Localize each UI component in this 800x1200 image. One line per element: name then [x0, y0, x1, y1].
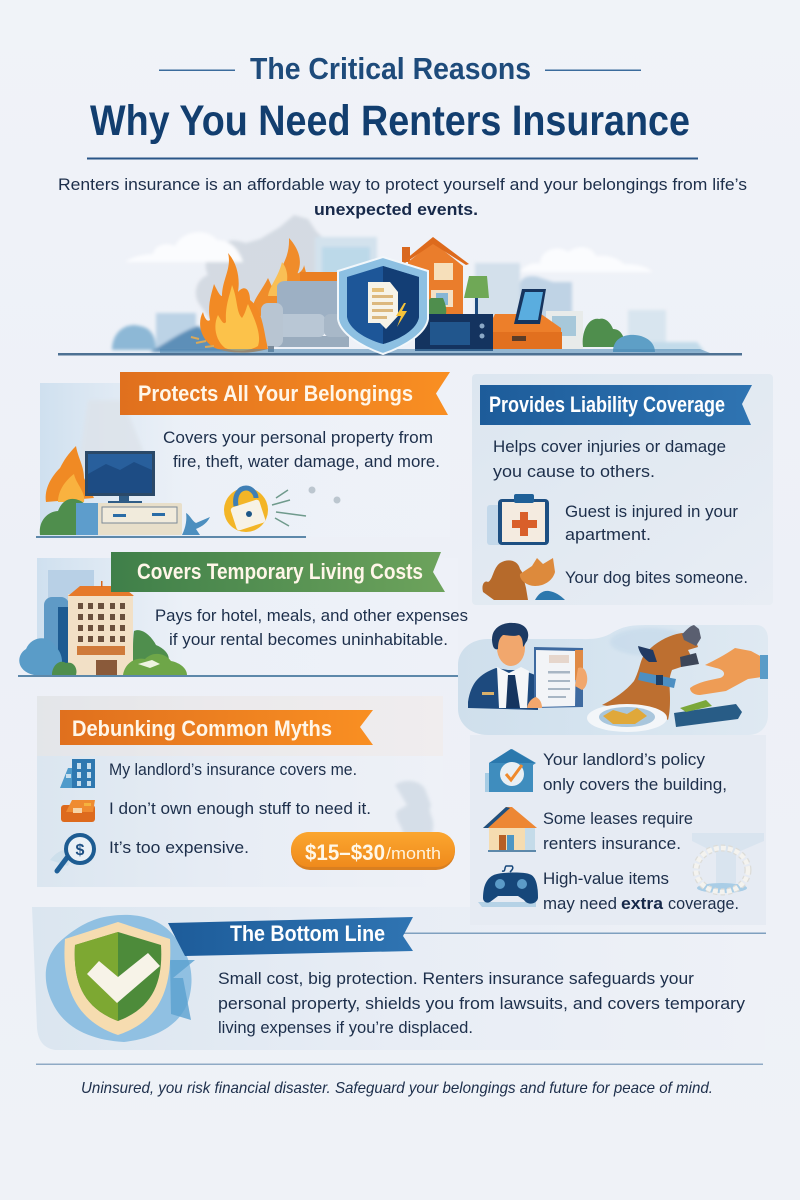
- text block: It’s too expensive.: [109, 838, 249, 857]
- banner: debunking common myths: Debunking Common Myths: [72, 716, 332, 741]
- illustration: burning computer desk: [40, 400, 210, 535]
- banner: provides liability coverage: Provides Liability Coverage: [489, 392, 725, 417]
- banner: the bottom line: The Bottom Line: [230, 921, 385, 946]
- icon: dogs: [482, 558, 565, 600]
- front flame: [200, 253, 268, 353]
- intro text: Renters insurance is an affordable way to protect yourself and your belongings from life’s: [58, 175, 747, 194]
- icon: game controller: [478, 866, 538, 907]
- text block: extra: [621, 894, 664, 913]
- banner: the bottom line: [168, 917, 413, 956]
- text block: Your dog bites someone.: [565, 568, 748, 587]
- text block: Some leases require: [543, 809, 693, 828]
- panel: protects belongings: [36, 372, 450, 538]
- icon: first aid clipboard: [487, 494, 549, 545]
- text block: [218, 969, 746, 1037]
- intro text: unexpected events.: [314, 200, 478, 219]
- illustration: agent, dog and injured hand: [458, 623, 768, 735]
- banner: covers temporary living costs: [111, 552, 445, 592]
- banner: protects all your belongings: [120, 372, 450, 415]
- text block: [543, 869, 739, 913]
- banner: protects all your belongings: Protects All Your Belongings: [138, 381, 413, 406]
- icon: pearl bracelet: [696, 848, 748, 893]
- plate with food: [587, 700, 742, 732]
- illustration: hotel building: [19, 570, 187, 675]
- hand: [690, 648, 768, 695]
- panel: the bottom line: [32, 907, 766, 1050]
- text block: Guest is injured in your: [565, 502, 738, 521]
- panel: debunking myths: [37, 696, 455, 887]
- banner: provides liability coverage: [480, 385, 752, 425]
- house: [400, 237, 469, 316]
- banner: debunking common myths: [60, 710, 373, 745]
- text block: [155, 606, 468, 649]
- price pill: $15–$30: [305, 840, 385, 865]
- text block: Helps cover injuries or damage: [493, 437, 726, 456]
- shield icon: [338, 257, 428, 354]
- icon: magnifier with dollar: [50, 835, 94, 871]
- title: [87, 51, 698, 160]
- text block: My landlord’s insurance covers me.: [109, 760, 357, 779]
- icon: house: [483, 807, 537, 852]
- text block: personal property, shields you from lawsuits, and covers temporary: [218, 994, 746, 1013]
- icon: house with check: [485, 749, 536, 792]
- price pill: [291, 832, 455, 870]
- text block: [543, 809, 693, 853]
- text block: [543, 750, 727, 794]
- text block: Covers your personal property from: [163, 428, 433, 447]
- sofa: [261, 272, 350, 352]
- clouds and faded skyline: [112, 215, 705, 352]
- hero illustration: fire, sofa, shield, house, electronics: [58, 215, 742, 356]
- faded display stand: [692, 833, 764, 883]
- dog: [602, 625, 701, 720]
- title: The Critical Reasons: [250, 51, 531, 86]
- text block: [163, 428, 440, 471]
- text block: High-value items: [543, 869, 669, 888]
- text block: Small cost, big protection. Renters insurance safeguards your: [218, 969, 694, 988]
- icon: green check shield: [46, 915, 195, 1042]
- banner: covers temporary living costs: Covers Temporary Living Costs: [137, 559, 423, 584]
- text block: living expenses if you’re displaced.: [218, 1018, 473, 1037]
- text block: [565, 502, 738, 544]
- intro text: [58, 175, 747, 219]
- icon: magnifier with dollar: $: [76, 842, 84, 859]
- footer note: Uninsured, you risk financial disaster. Safeguard your belongings and future for peace of mind.: [81, 1080, 713, 1097]
- text block: only covers the building,: [543, 775, 727, 794]
- text block: I don’t own enough stuff to need it.: [109, 799, 371, 818]
- ground line: [160, 349, 710, 353]
- lamp: [464, 276, 489, 314]
- text block: may need: [543, 894, 617, 913]
- text block: fire, theft, water damage, and more.: [173, 452, 440, 471]
- back flame: [253, 238, 308, 318]
- icon: apartment building: [60, 759, 95, 788]
- agent: [468, 623, 587, 710]
- panel: more reasons: [470, 735, 766, 925]
- panel: temporary living costs: [18, 552, 468, 677]
- text block: apartment.: [565, 525, 651, 544]
- title: Why You Need Renters Insurance: [90, 97, 690, 145]
- text block: if your rental becomes uninhabitable.: [169, 630, 448, 649]
- text block: Your landlord’s policy: [543, 750, 706, 769]
- icon: box of belongings: [61, 800, 95, 822]
- panel: liability coverage: [472, 374, 773, 605]
- text block: coverage.: [668, 894, 739, 913]
- text block: you cause to others.: [493, 462, 655, 481]
- price pill: /month: [386, 844, 441, 863]
- potted plant: [426, 298, 446, 314]
- appliance, drawer and tablet: [493, 289, 655, 352]
- text block: [493, 437, 726, 481]
- tv console: [415, 314, 493, 351]
- faded background icon: [395, 781, 433, 839]
- text block: Pays for hotel, meals, and other expenses: [155, 606, 468, 625]
- icon: padlock coin: [224, 486, 340, 532]
- text block: renters insurance.: [543, 834, 681, 853]
